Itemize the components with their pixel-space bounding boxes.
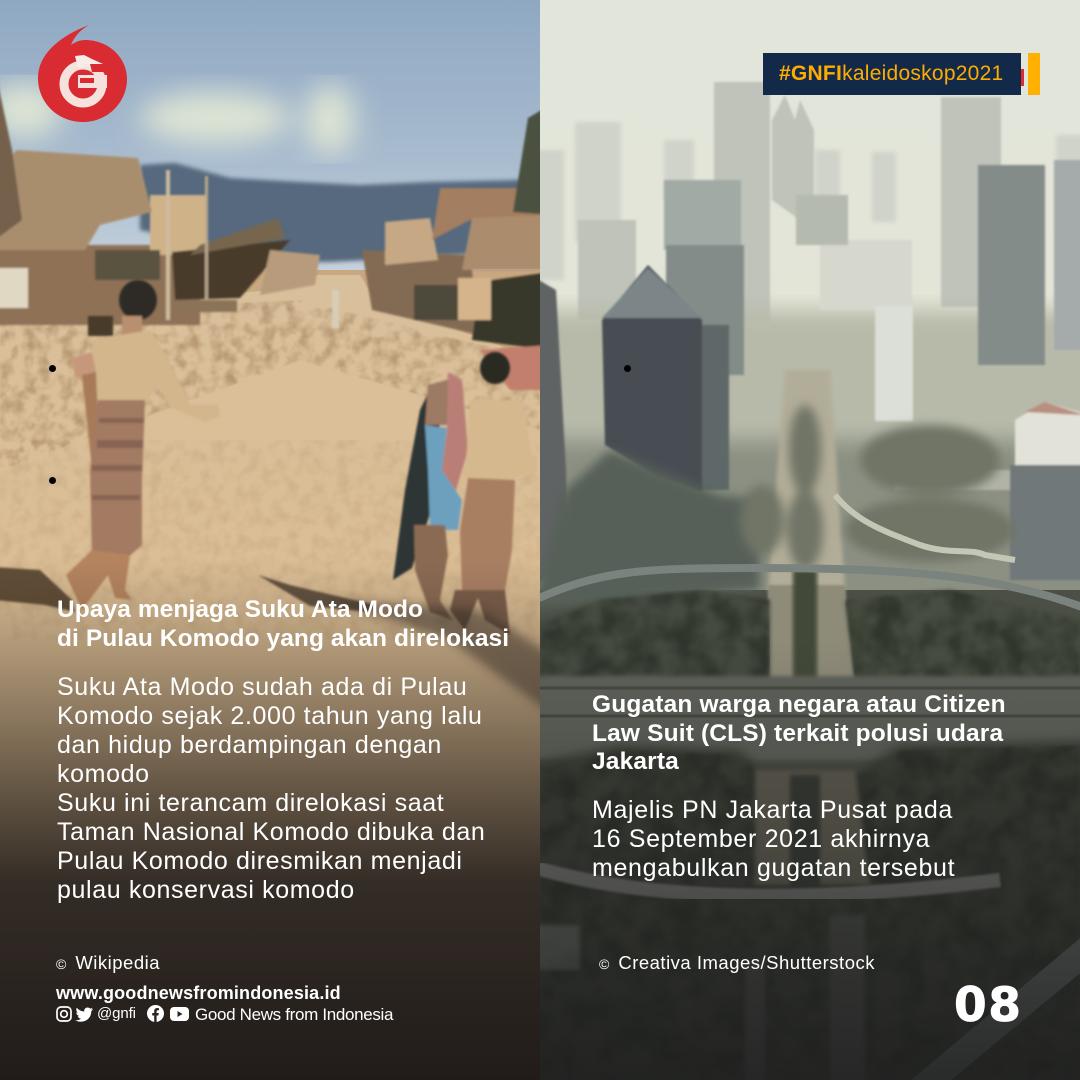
lower base tone [540,590,1080,776]
ground [0,275,540,750]
dark gradient [0,560,540,1080]
left heading: Upaya menjaga Suku Ata Modo [57,596,423,623]
right body text: mengabulkan gugatan tersebut [592,854,955,882]
right heading: Law Suit (CLS) terkait polusi udara [592,720,1003,746]
huts left [0,70,320,325]
icon: youtube [170,1007,189,1021]
trees mid [561,589,772,678]
left body text: Pulau Komodo diresmikan menjadi [57,847,463,875]
icon: instagram [56,1006,72,1022]
left body text: Suku ini terancam direlokasi saat [57,789,444,817]
mid haze ground [556,301,1080,448]
centre road haze [768,370,845,590]
mid towers [664,160,1080,421]
left body text: dan hidup berdampingan dengan [57,731,442,759]
elevated roads [835,495,1015,560]
dots [49,365,631,484]
left credit: © Wikipedia [56,952,160,973]
people right [393,352,535,635]
right body text: Majelis PN Jakarta Pusat pada [592,796,953,824]
ground shadows [0,567,75,612]
left dark towers [530,265,729,590]
left body text: pulau konservasi komodo [57,876,355,904]
mountains [140,163,560,262]
right body text: 16 September 2021 akhirnya [592,825,930,853]
right buildings [895,402,1080,580]
hashtag tag [763,53,1040,95]
road lower part [765,585,855,680]
left body text [57,673,485,904]
brand name: Good News from Indonesia [195,1005,393,1024]
logo emblem [64,55,107,103]
right heading: Gugatan warga negara atau Citizen [592,691,1006,718]
clouds [0,82,355,156]
left heading: di Pulau Komodo yang akan direlokasi [57,625,509,652]
far buildings [525,122,1080,280]
right photo: hazy Jakarta [490,0,1080,1080]
page number: 08 [954,978,1022,1033]
right heading [592,691,1006,775]
icon: facebook [147,1005,164,1022]
website: www.goodnewsfromindonesia.id [56,983,341,1003]
icon: twitter [75,1008,93,1022]
huts right [332,105,550,390]
hazy trees left and right [530,450,760,610]
hashtag tag: #GNFIkaleidoskop2021 [779,62,1003,85]
left body text: Taman Nasional Komodo dibuka dan [57,818,485,846]
left body text: komodo [57,760,150,788]
left heading [57,596,509,652]
person: woman left [66,280,220,610]
handle: @gnfi [97,1005,136,1022]
left photo: village scene [0,0,540,986]
left body text: Komodo sejak 2.000 tahun yang lalu [57,702,483,730]
logo: GNFI red badge [38,25,127,122]
right heading: Jakarta [592,748,679,775]
right body text [592,796,955,882]
lower trees [540,737,1080,958]
right credit: © Creativa Images/Shutterstock [599,952,875,973]
left body text: Suku Ata Modo sudah ada di Pulau [57,673,467,701]
social row [56,1005,394,1024]
road bands [530,676,1080,760]
